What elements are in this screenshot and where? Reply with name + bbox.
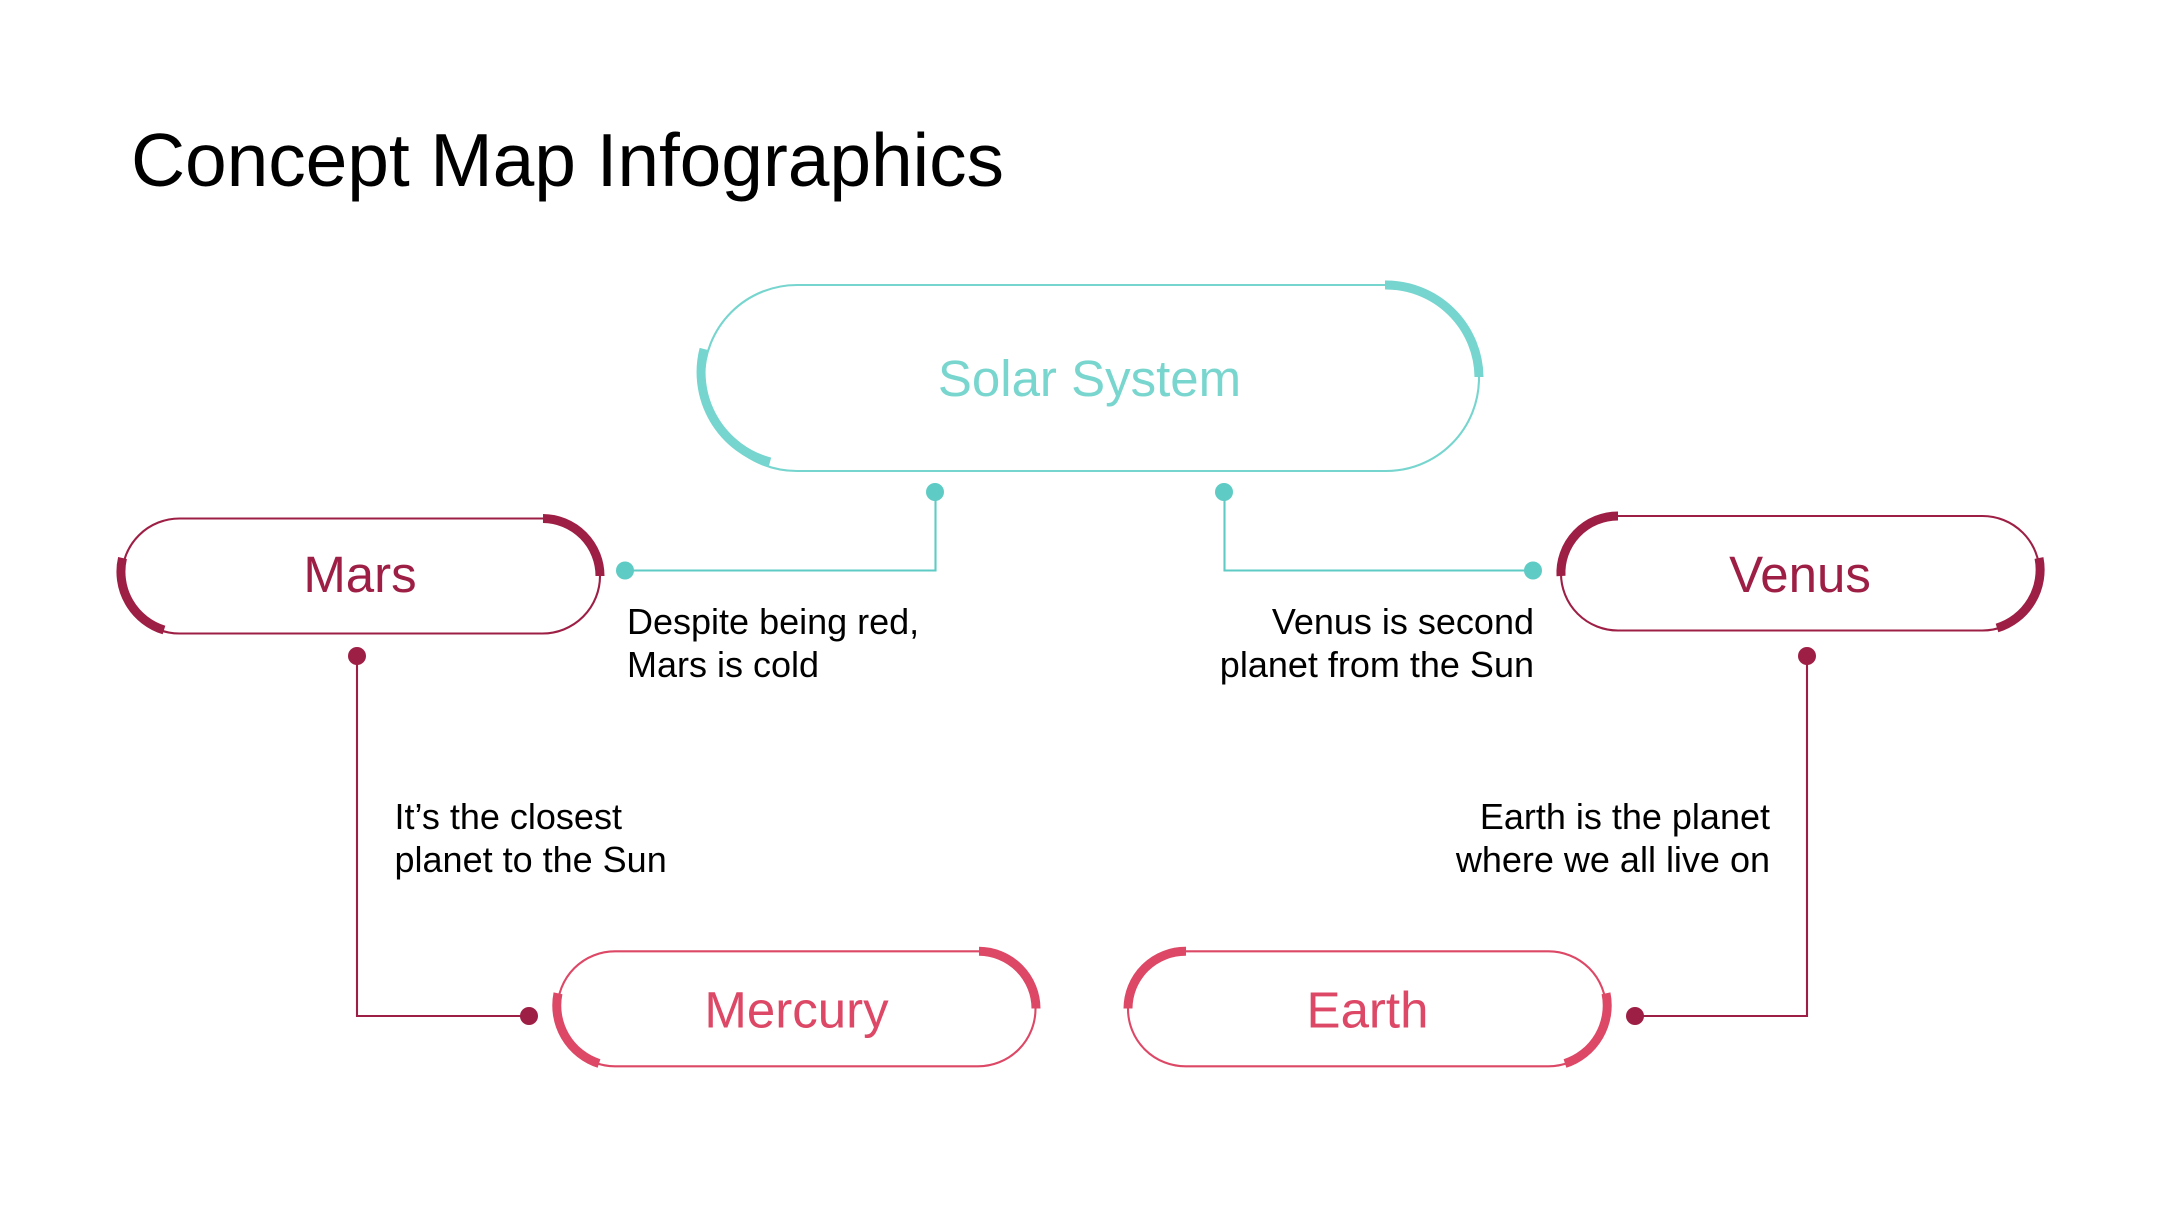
- text: Earth description: where we all live on: [1455, 839, 1770, 880]
- node: Mercury: [557, 951, 1036, 1066]
- title: Concept Map Infographics: [131, 118, 1004, 202]
- text: Earth description: Earth is the planet: [1480, 796, 1770, 837]
- connector: Solar System to Mars: [616, 483, 944, 580]
- node: Solar System: Solar System: [938, 350, 1241, 407]
- node: Earth: Earth: [1307, 982, 1428, 1038]
- node: Mars: Mars: [303, 546, 417, 603]
- connector: Mars to Mercury: [348, 647, 538, 1025]
- node: Mercury: Mercury: [704, 982, 889, 1038]
- text: Mars description: Despite being red,: [627, 601, 919, 642]
- node: Venus: Venus: [1729, 546, 1871, 603]
- text: Venus description: Venus is second: [1272, 601, 1534, 642]
- text: Mercury description: It’s the closest: [394, 796, 622, 837]
- text: Mars description: Mars is cold: [627, 644, 819, 685]
- connector: Solar System to Venus: [1215, 483, 1542, 580]
- text: Venus description: planet from the Sun: [1220, 644, 1534, 685]
- node: Venus: [1561, 516, 2040, 630]
- connector: Venus to Earth: [1626, 647, 1816, 1025]
- node: Mars: [121, 518, 600, 634]
- node: Solar System: [701, 285, 1479, 471]
- text: Mercury description: planet to the Sun: [394, 839, 667, 880]
- node: Earth: [1128, 951, 1607, 1066]
